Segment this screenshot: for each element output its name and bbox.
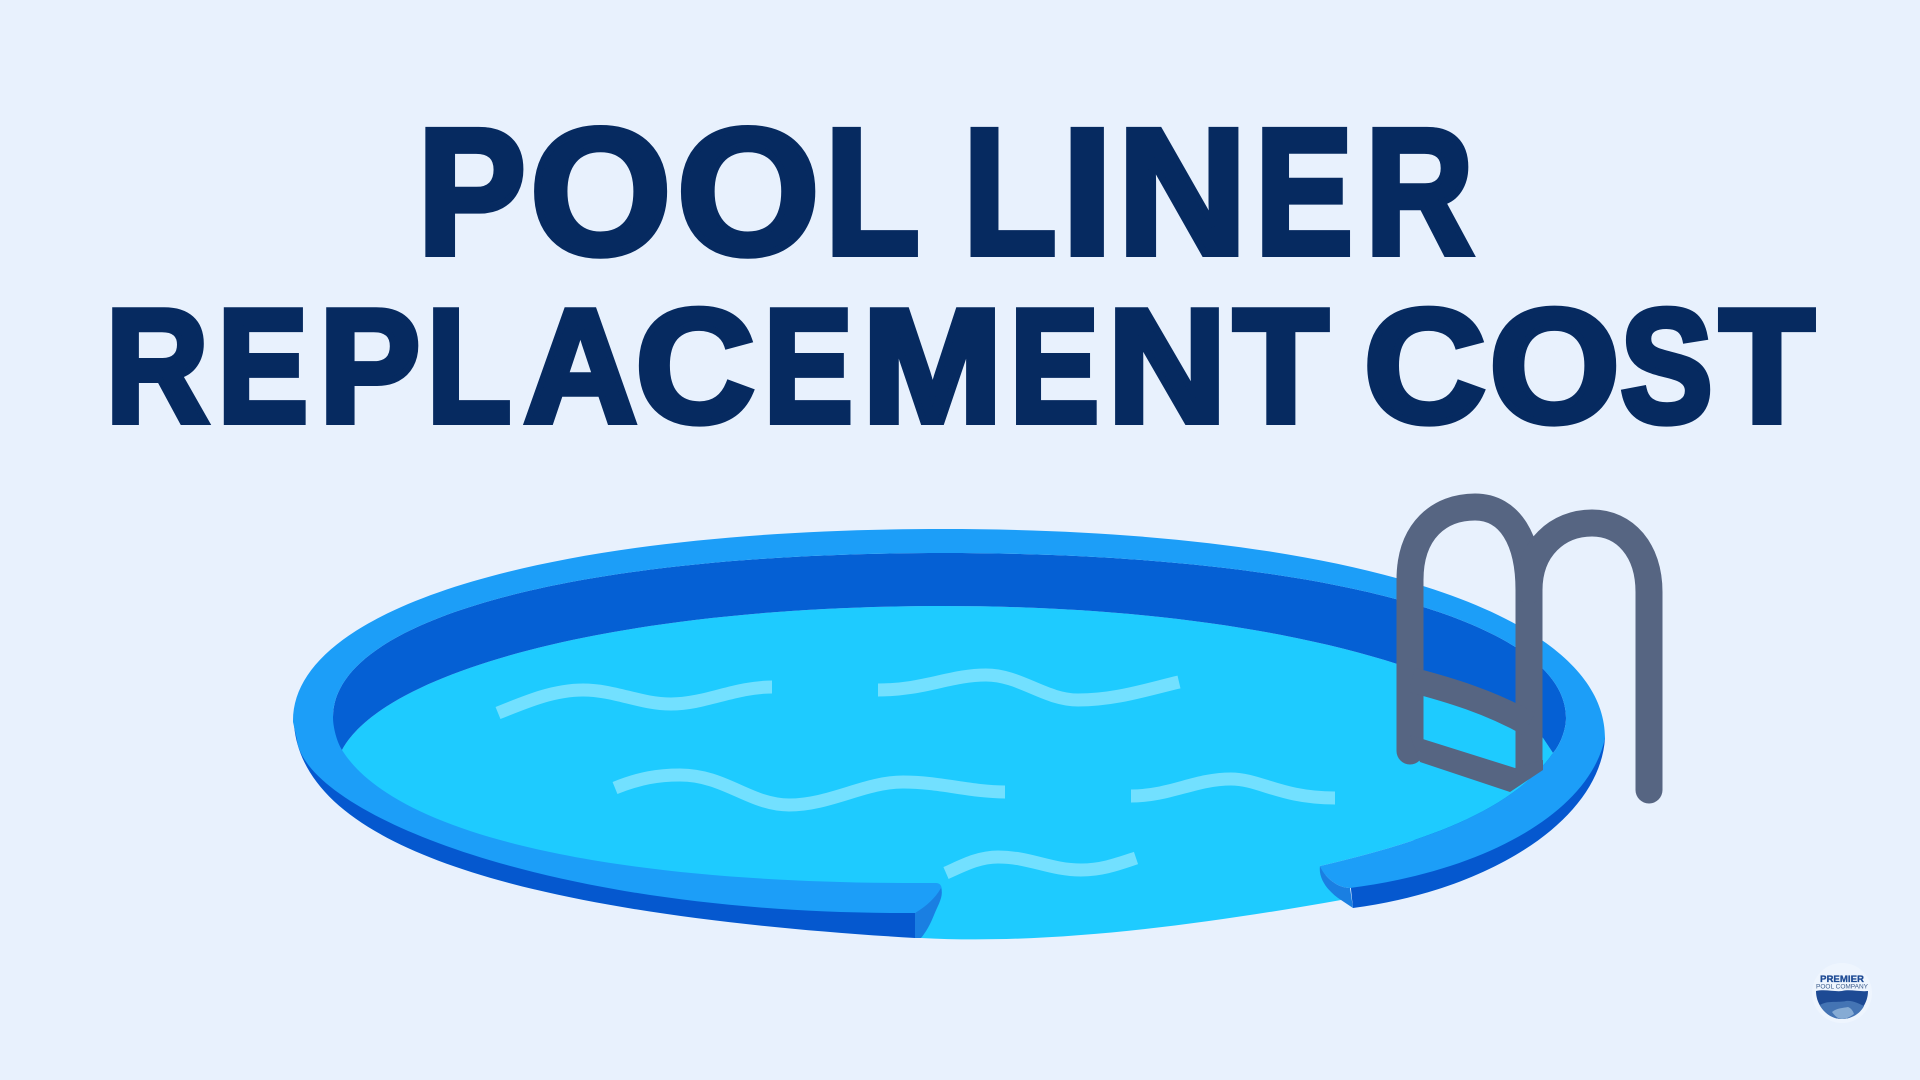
title: O (530, 92, 671, 292)
title: N (1118, 92, 1247, 292)
title: E (218, 276, 308, 456)
title: E (1010, 276, 1099, 456)
logo tagline: POOL COMPANY (1816, 984, 1868, 990)
pool ladder (1410, 507, 1649, 792)
water surface (335, 606, 1553, 939)
title: L (825, 92, 917, 292)
water ripples (498, 675, 1335, 873)
title: M (862, 276, 1003, 456)
title: E (764, 276, 853, 456)
title: C (636, 276, 755, 456)
torn rim edge, left (915, 888, 942, 938)
logo light wave (1832, 1007, 1854, 1019)
title: T (1234, 276, 1328, 456)
pool rim (293, 529, 1605, 913)
title: R (106, 276, 208, 456)
logo backdrop (1812, 963, 1872, 1023)
title: P (418, 92, 526, 292)
title: N (1108, 276, 1226, 456)
title: C (1364, 276, 1486, 456)
title: E (1255, 92, 1353, 292)
inner liner wall (325, 553, 1566, 753)
title: I (1062, 92, 1112, 292)
pool side wall, left (294, 725, 915, 938)
title: L (427, 276, 511, 456)
title (106, 92, 1814, 456)
logo mid wave (1820, 1001, 1864, 1019)
logo name: PREMIER (1820, 974, 1864, 985)
title: L (963, 92, 1056, 292)
pool side wall, right (1350, 730, 1605, 908)
illustration: above-ground pool (293, 507, 1649, 939)
title: R (1365, 92, 1474, 292)
title: S (1620, 276, 1713, 456)
title: A (524, 276, 637, 456)
title: P (319, 276, 420, 456)
title: O (1490, 276, 1620, 456)
title: T (1720, 276, 1814, 456)
logo: Premier Pool Company (1812, 963, 1872, 1023)
logo water (1816, 990, 1868, 1019)
title: O (677, 92, 819, 292)
torn rim edge, right (1320, 866, 1353, 908)
